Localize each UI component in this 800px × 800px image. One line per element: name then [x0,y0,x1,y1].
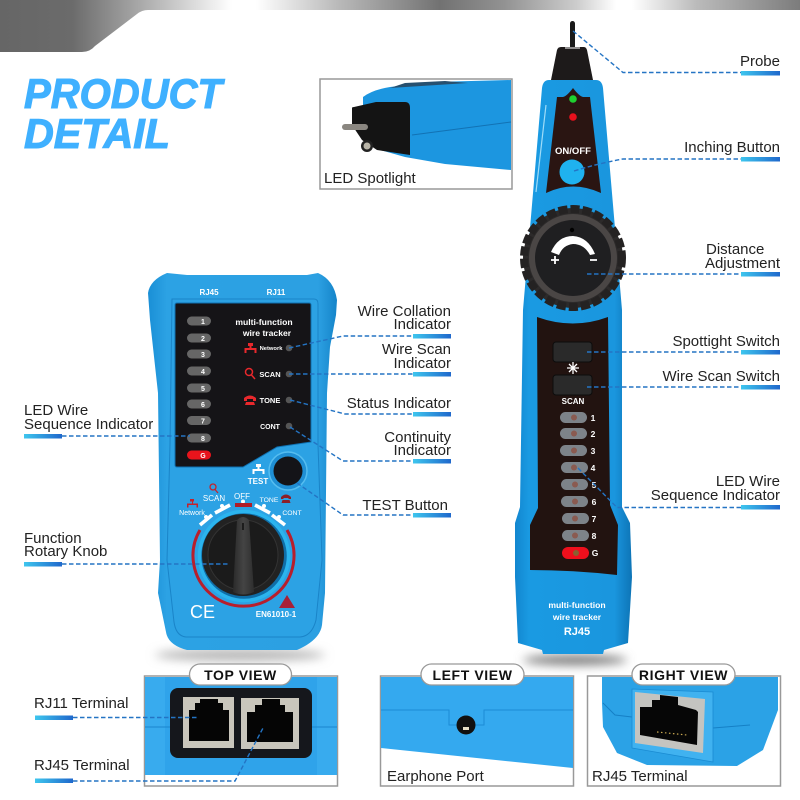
callout: Probe [573,31,780,76]
callout: RJ45 Terminal: RJ45 Terminal [34,757,130,774]
panel heading: multi-function [235,317,293,327]
callout: Wire Collation Indicator: Wire Collation [358,303,451,320]
test label: TEST [248,477,268,486]
pen printed text [548,600,606,638]
callout: tester LED Wire Sequence Indicator: Sequence Indicator [24,416,153,433]
callout: Continuity Indicator: Indicator [393,442,451,459]
panel heading: wire tracker [242,328,292,338]
LED sequence column: 6 [201,402,205,409]
rotary scale labels: CONT [282,510,302,517]
RJ45 port [632,689,713,762]
pen printed text: multi-function [548,600,606,610]
lower control panel [530,317,618,575]
LED sequence column: 2 [591,429,596,439]
scan switch [553,375,592,395]
LED sequence column: 5 [201,386,205,393]
callout: Wire Scan Switch: Wire Scan Switch [662,368,780,385]
label: RJ45 Terminal: RJ45 Terminal [592,768,688,785]
LED sequence column: G [200,453,206,460]
status indicators [259,345,292,431]
callout: Function Rotary Knob [24,530,230,566]
status indicators: SCAN [259,370,281,379]
shadow under pen [523,655,627,665]
callout: Wire Scan Indicator [289,341,451,376]
top port labels [199,288,286,297]
inching button [560,160,584,184]
black display panel [175,303,311,467]
callout: TEST Button [297,483,451,518]
top view pill [190,664,292,685]
callout: Continuity Indicator: Continuity [384,429,451,446]
title: DETAIL [24,110,170,157]
top port labels: RJ11 [267,288,286,297]
left view pill [421,664,524,685]
rotary scale labels: SCAN [203,494,225,503]
LED sequence column: 8 [592,531,597,541]
LED sequence column: 7 [592,514,597,524]
callout: RJ45 Terminal [34,728,263,783]
icon: red magnifier [246,368,255,379]
rotary scale labels: Network [179,510,205,517]
callout: tester LED Wire Sequence Indicator [24,402,190,438]
callout: RJ11 Terminal: RJ11 Terminal [34,695,128,712]
status indicators: CONT [260,424,281,431]
label: Earphone Port: Earphone Port [387,768,485,785]
callout: TEST Button: TEST Button [362,497,448,514]
callout: Inching Button: Inching Button [684,139,780,156]
icon: red network [244,343,256,353]
spotlight switch [553,342,592,362]
distance dial [523,208,623,308]
pen printed text: wire tracker [552,612,602,622]
device: wire tracker receiver [148,273,337,650]
LED sequence column: 4 [591,463,596,473]
status indicators: Network [260,346,283,352]
callout: RJ11 Terminal [34,695,198,720]
earphone jack [456,716,476,734]
LED sequence column: 2 [201,336,205,343]
top banner [0,0,800,52]
shadow under tester [155,649,325,661]
callout: Inching Button [574,139,780,171]
callout: Probe: Probe [740,53,780,70]
callout: pen LED Wire Sequence Indicator: LED Wire [716,473,780,490]
LED sequence column: 1 [591,413,596,423]
left view pill: LEFT VIEW [432,667,513,683]
right view pill: RIGHT VIEW [639,667,728,683]
LED sequence column: 4 [201,369,205,376]
rotary scale labels: TONE [260,497,279,504]
panel: right view [588,664,780,786]
panel: left view [380,664,574,786]
test button [269,452,307,490]
callout: tester LED Wire Sequence Indicator: LED Wire [24,402,88,419]
label: LED Spotlight: LED Spotlight [324,170,417,187]
status indicators: TONE [260,396,280,405]
LED sequence column: 8 [201,436,205,443]
rotary scale labels [179,484,302,517]
callout: Spottight Switch: Spottight Switch [672,333,780,350]
callout: Wire Scan Indicator: Wire Scan [382,341,451,358]
top view pill: TOP VIEW [204,667,277,683]
sun icon [567,362,579,374]
LED sequence column: 3 [201,352,205,359]
callout: Distance Adjustment: Distance [706,241,764,258]
callout: Distance Adjustment: Adjustment [705,255,781,272]
callout: Status Indicator: Status Indicator [347,395,451,412]
device: wire tracker probe pen [515,21,632,654]
callout: Function Rotary Knob: Function [24,530,82,547]
certification: EN61010-1 [256,610,297,619]
RJ45 port [241,698,299,749]
probe tip [551,21,593,80]
port housing [170,688,312,758]
LED sequence column: 3 [591,446,596,456]
LED sequence column [560,412,599,559]
panel heading [235,317,293,338]
callout: pen LED Wire Sequence Indicator: Sequence Indicator [651,487,780,504]
callout: Wire Collation Indicator: Indicator [393,316,451,333]
top port labels: RJ45 [199,288,219,297]
callout: Wire Scan Indicator: Indicator [393,355,451,372]
panel: LED spotlight inset [320,79,512,189]
callout: Spottight Switch [587,333,780,354]
test label [248,464,268,486]
icon: red phone [244,396,256,405]
RJ11 port [183,697,234,748]
LED sequence column: 5 [592,480,597,490]
callout: Distance Adjustment [587,241,781,276]
rotary knob [193,500,294,606]
callout: Status Indicator [290,395,451,416]
scan label: SCAN [562,397,585,406]
panel: top view [144,664,338,786]
certification [256,595,297,619]
callout: Function Rotary Knob: Rotary Knob [24,543,107,560]
LED sequence column: 7 [201,418,205,426]
title: PRODUCT [24,70,225,117]
upper control panel [546,88,601,193]
LED sequence column: 1 [201,319,205,326]
callout: pen LED Wire Sequence Indicator [578,468,780,510]
callout: Continuity Indicator [290,427,451,464]
LED sequence column: G [592,548,599,558]
pen printed text: RJ45 [564,626,590,638]
status LEDs [569,95,577,121]
callout: Wire Scan Switch [587,368,780,390]
LED sequence column [187,316,211,460]
LED sequence column: 6 [592,497,597,507]
rotary scale labels: OFF [234,492,250,501]
on/off label: ON/OFF [555,146,591,157]
callout: Wire Collation Indicator [289,303,451,348]
CE mark: CE [190,602,215,622]
title [24,70,225,157]
right view pill [632,664,735,685]
